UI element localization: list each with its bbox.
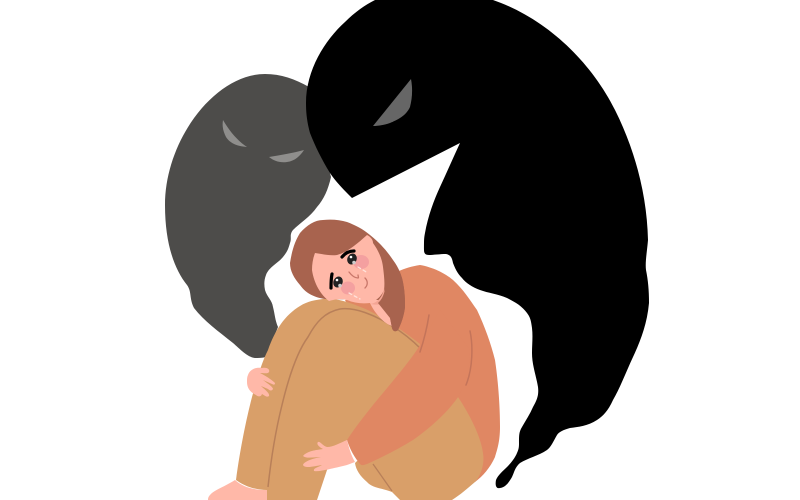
foot <box>208 480 267 500</box>
left hand <box>247 368 275 397</box>
woman <box>208 220 500 500</box>
right cheek blush <box>341 282 355 294</box>
face shadow <box>370 288 385 305</box>
sweater crease left <box>420 315 429 352</box>
neck <box>368 298 392 326</box>
hip crease <box>373 464 392 491</box>
upper eye <box>345 252 359 266</box>
black shadow figure <box>306 0 649 488</box>
nose <box>349 272 358 278</box>
left cheek blush <box>353 255 369 269</box>
pants front leg <box>236 299 440 500</box>
grey figure left eye <box>223 120 247 147</box>
grey figure right eye <box>269 150 304 162</box>
lower eye <box>331 275 345 289</box>
black figure eye <box>373 79 412 126</box>
right hand <box>303 440 355 471</box>
face <box>312 235 384 303</box>
mouth <box>365 278 367 288</box>
tears <box>349 267 368 299</box>
hair back and sides <box>290 220 405 331</box>
pants hip <box>355 397 483 500</box>
front hair lock <box>373 240 405 331</box>
grey shadow figure <box>165 74 331 358</box>
sweater torso <box>345 265 500 482</box>
upper eyebrow <box>342 251 354 257</box>
sweater arm <box>347 310 470 465</box>
pants knee crease <box>268 309 421 487</box>
lower eyebrow <box>331 274 332 288</box>
sweater crease right <box>466 331 472 385</box>
